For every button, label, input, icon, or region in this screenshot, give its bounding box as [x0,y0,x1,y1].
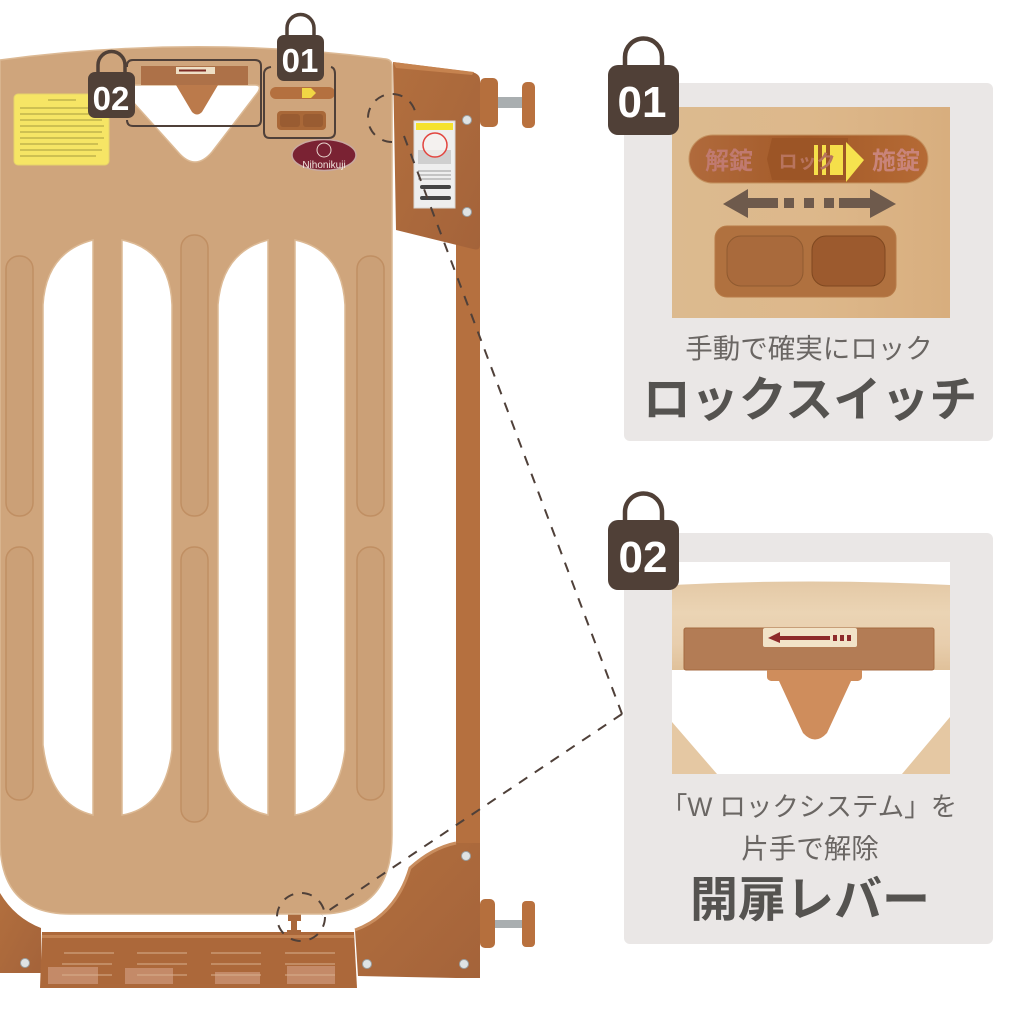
photo: lock switch closeup [672,107,950,318]
label strip: 解錠 [705,148,753,175]
dashed leader lines [277,94,672,941]
slide button [715,226,896,297]
photo: lever closeup [672,562,950,774]
double arrow [723,189,896,218]
subtitle: 手動で確実にロック [685,333,933,364]
lever tab [767,670,862,740]
large lock badge 02: 02 [619,533,667,582]
large lock badge 01: 01 [618,78,666,127]
yellow caution sticker [14,94,109,165]
small lever [141,66,248,114]
gate frame [393,62,535,846]
panel: release lever [624,533,993,944]
nihonikuji logo [292,140,356,171]
small lock badge 01 [277,14,324,81]
gate door panel [0,47,392,914]
small lock badge 01: 01 [282,42,318,79]
heading: 開扉レバー [690,874,930,927]
small lock switch [270,87,335,130]
top bracket screws [462,116,472,216]
heading: ロックスイッチ [643,374,977,427]
warning label [414,121,455,208]
label strip: 施錠 [872,148,920,175]
callout bracket 02 [127,60,261,126]
large lock badge 01 [608,38,679,135]
panel ribs [6,235,384,822]
nihonikuji logo: Nihonikuji [302,160,346,171]
lower left bracket [0,893,41,973]
lower right bracket [355,843,535,978]
top adjuster [480,78,535,128]
lever pin [287,914,301,934]
callout bracket 01 [264,67,335,138]
subtitle line 1: 「W ロックシステム」を [661,792,957,822]
label strip: ロック [778,151,836,173]
large lock badge 02 [608,494,679,590]
label strip [689,135,928,183]
small lock badge 02 [88,52,135,118]
lever handle [684,628,934,670]
panel: lock switch [624,83,993,441]
small lock badge 02: 02 [93,80,129,117]
subtitle line 2: 片手で解除 [741,833,879,864]
floor plate [20,932,357,988]
